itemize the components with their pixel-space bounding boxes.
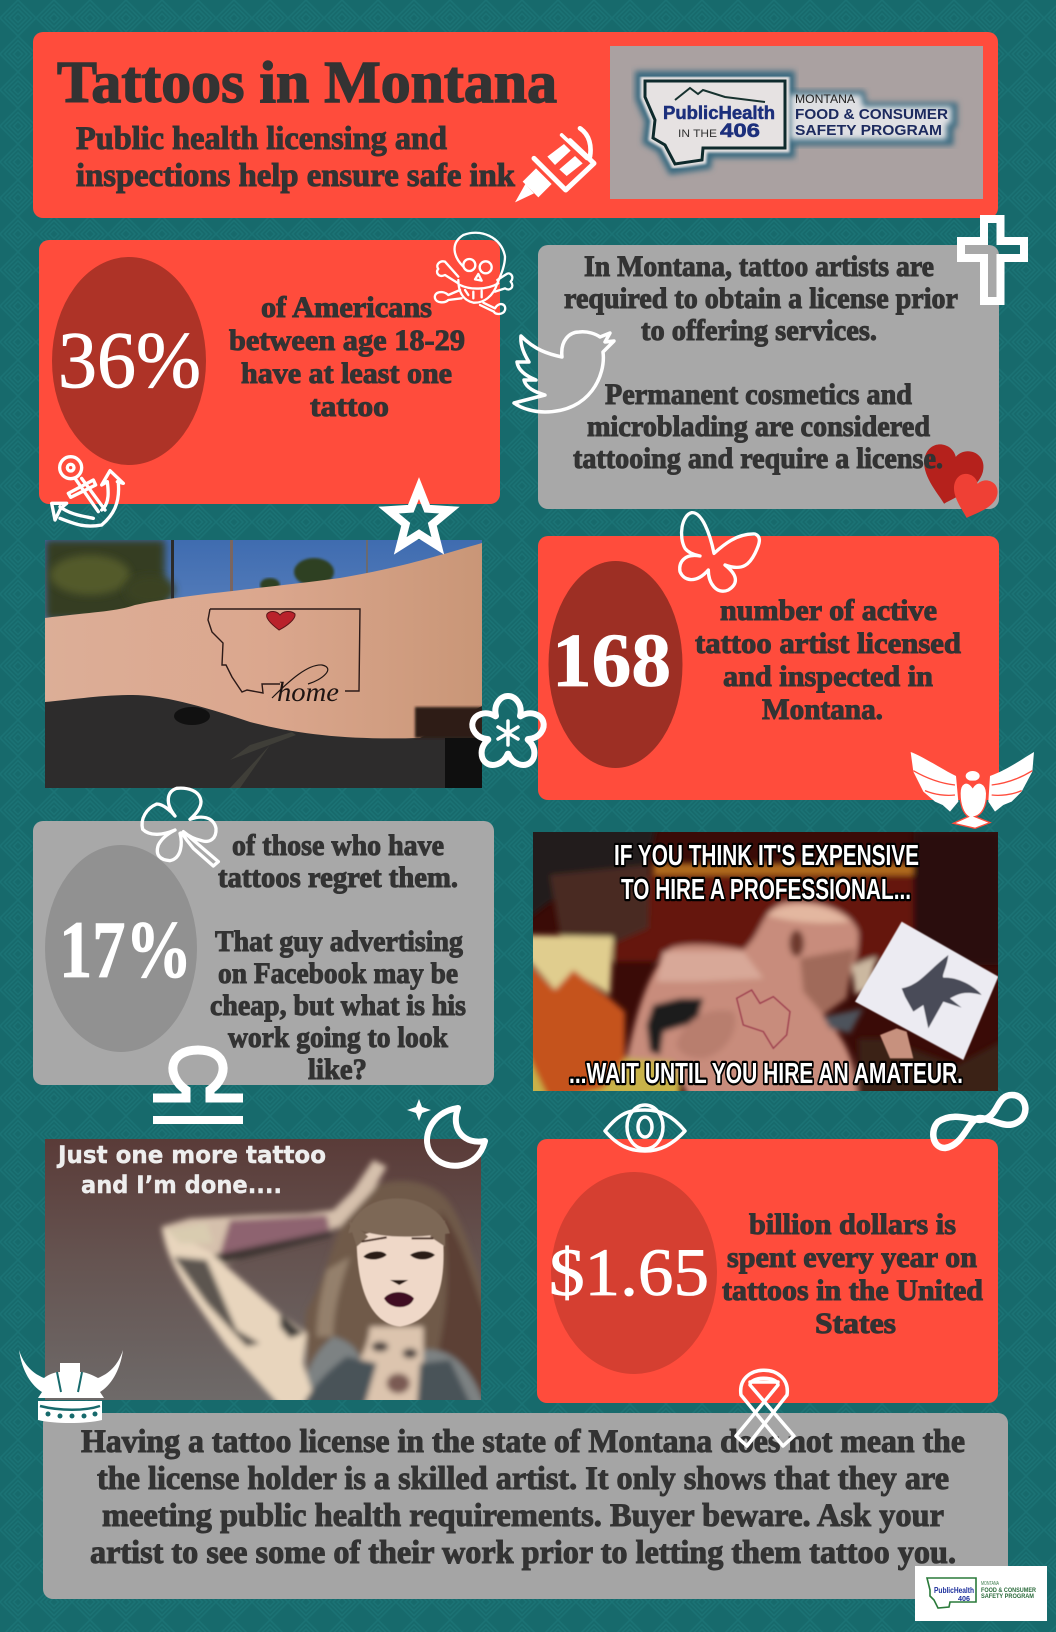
icon: libra symbol — [153, 1050, 243, 1124]
panel: buyer beware: meeting public health requirements. Buyer beware. Ask your — [102, 1498, 944, 1534]
meme caption: Just one more tattoo — [56, 1141, 326, 1169]
logo panel: FOOD & CONSUMER — [795, 106, 948, 123]
stat description: of Americans — [261, 291, 432, 324]
logo panel: 406 — [720, 121, 760, 142]
icon: butterfly — [680, 513, 759, 591]
stat description — [229, 291, 465, 423]
stat description: tattoos in the United — [722, 1274, 983, 1307]
panel: licensing requirements: to offering services. — [641, 314, 877, 347]
stat description: and inspected in — [723, 660, 933, 693]
footer logo: FOOD & CONSUMER — [981, 1587, 1036, 1594]
stat description: tattoos regret them. — [218, 861, 458, 894]
stat: 36%: 36% — [58, 315, 201, 405]
icon: anchor — [52, 457, 123, 526]
panel: licensing requirements: In Montana, tattoo artists are — [584, 250, 934, 283]
title: Tattoos in Montana — [57, 49, 557, 115]
footer logo: PublicHealth — [934, 1586, 974, 1595]
icon: skull and crossbones — [435, 233, 512, 314]
meme caption text — [569, 840, 963, 1090]
stat description — [695, 594, 961, 726]
tattoo outline of Montana — [208, 609, 360, 693]
footer logo: SAFETY PROGRAM — [981, 1593, 1034, 1600]
panel: licensing requirements: required to obtain a license prior — [564, 282, 958, 315]
icon: eagle — [911, 752, 1034, 828]
logo panel: SAFETY PROGRAM — [795, 122, 942, 139]
icon: eye — [605, 1105, 685, 1151]
panel: 36 percent — [39, 240, 500, 504]
logo panel — [610, 46, 983, 199]
icon: viking helmet — [19, 1350, 123, 1423]
subtitle: Public health licensing and — [76, 121, 447, 157]
stat description: like? — [308, 1053, 367, 1086]
photo: Montana arm tattoo: home — [277, 677, 339, 707]
subtitle: inspections help ensure safe ink — [76, 158, 516, 194]
stat: 168: 168 — [552, 619, 671, 703]
stat description: between age 18-29 — [229, 324, 465, 357]
panel: 168 artists — [538, 536, 999, 800]
footer logo — [915, 1566, 1047, 1621]
stat description: tattoo — [310, 390, 389, 423]
icon: twitter bird — [514, 332, 614, 412]
icon: hearts — [915, 441, 1001, 525]
logo panel: PublicHealth — [663, 103, 775, 123]
stat: 17%: 17% — [59, 904, 192, 995]
footer logo: MONTANA — [981, 1581, 999, 1587]
panel: buyer beware: the license holder is a skilled artist. It only shows that they are — [97, 1461, 949, 1497]
stat description: tattoo artist licensed — [695, 627, 961, 660]
stat description: That guy advertising — [215, 925, 463, 958]
stat description: Montana. — [762, 693, 883, 726]
icon: infinity — [933, 1095, 1025, 1148]
panel: buyer beware: Having a tattoo license in the state of Montana does not mean the — [81, 1424, 965, 1460]
stat description: on Facebook may be — [218, 957, 458, 990]
stat description: of those who have — [232, 829, 444, 862]
logo panel: IN THE — [678, 128, 717, 140]
stat description: billion dollars is — [749, 1208, 956, 1241]
panel: 17 percent regret — [33, 821, 494, 1086]
icon: clover — [142, 788, 218, 866]
stat description — [722, 1208, 983, 1340]
panel: licensing requirements: microblading are considered — [587, 410, 930, 443]
stat description: number of active — [720, 594, 937, 627]
photo: Montana arm tattoo — [45, 540, 482, 788]
icon: moon and sparkle — [407, 1099, 485, 1166]
panel: licensing requirements — [538, 245, 1001, 525]
stat description: States — [815, 1307, 896, 1340]
panel: licensing requirements: Permanent cosmetics and — [605, 378, 912, 411]
stat description: work going to look — [228, 1021, 448, 1054]
meme caption text: IF YOU THINK IT'S EXPENSIVE — [614, 840, 919, 872]
panel: buyer beware: artist to see some of their work prior to letting them tattoo you. — [90, 1535, 956, 1571]
subtitle — [76, 121, 516, 194]
icon: flower with asterisk — [469, 696, 547, 770]
stat description: spent every year on — [727, 1241, 977, 1274]
icon: tattoo machine — [515, 128, 594, 202]
logo panel: MONTANA — [795, 92, 855, 106]
panel: licensing requirements: tattooing and require a license. — [573, 442, 943, 475]
photo: tattooed woman — [45, 1139, 487, 1410]
footer logo: 406 — [958, 1596, 970, 1603]
panel: 1.65 billion — [537, 1139, 998, 1403]
meme caption: and I’m done.... — [81, 1171, 282, 1199]
icon: awareness ribbon — [736, 1370, 794, 1446]
photo: amateur tattoo meme — [533, 832, 998, 1091]
meme caption text: TO HIRE A PROFESSIONAL... — [621, 874, 911, 906]
icon: star — [389, 488, 449, 546]
icon: cross — [961, 219, 1024, 301]
meme caption — [56, 1145, 326, 1194]
stat description: cheap, but what is his — [210, 989, 466, 1022]
panel: header — [33, 32, 998, 218]
stat: $1.65: $1.65 — [549, 1234, 709, 1310]
stat description — [210, 829, 466, 1086]
stat description: have at least one — [241, 357, 452, 390]
panel: buyer beware — [43, 1413, 1008, 1599]
